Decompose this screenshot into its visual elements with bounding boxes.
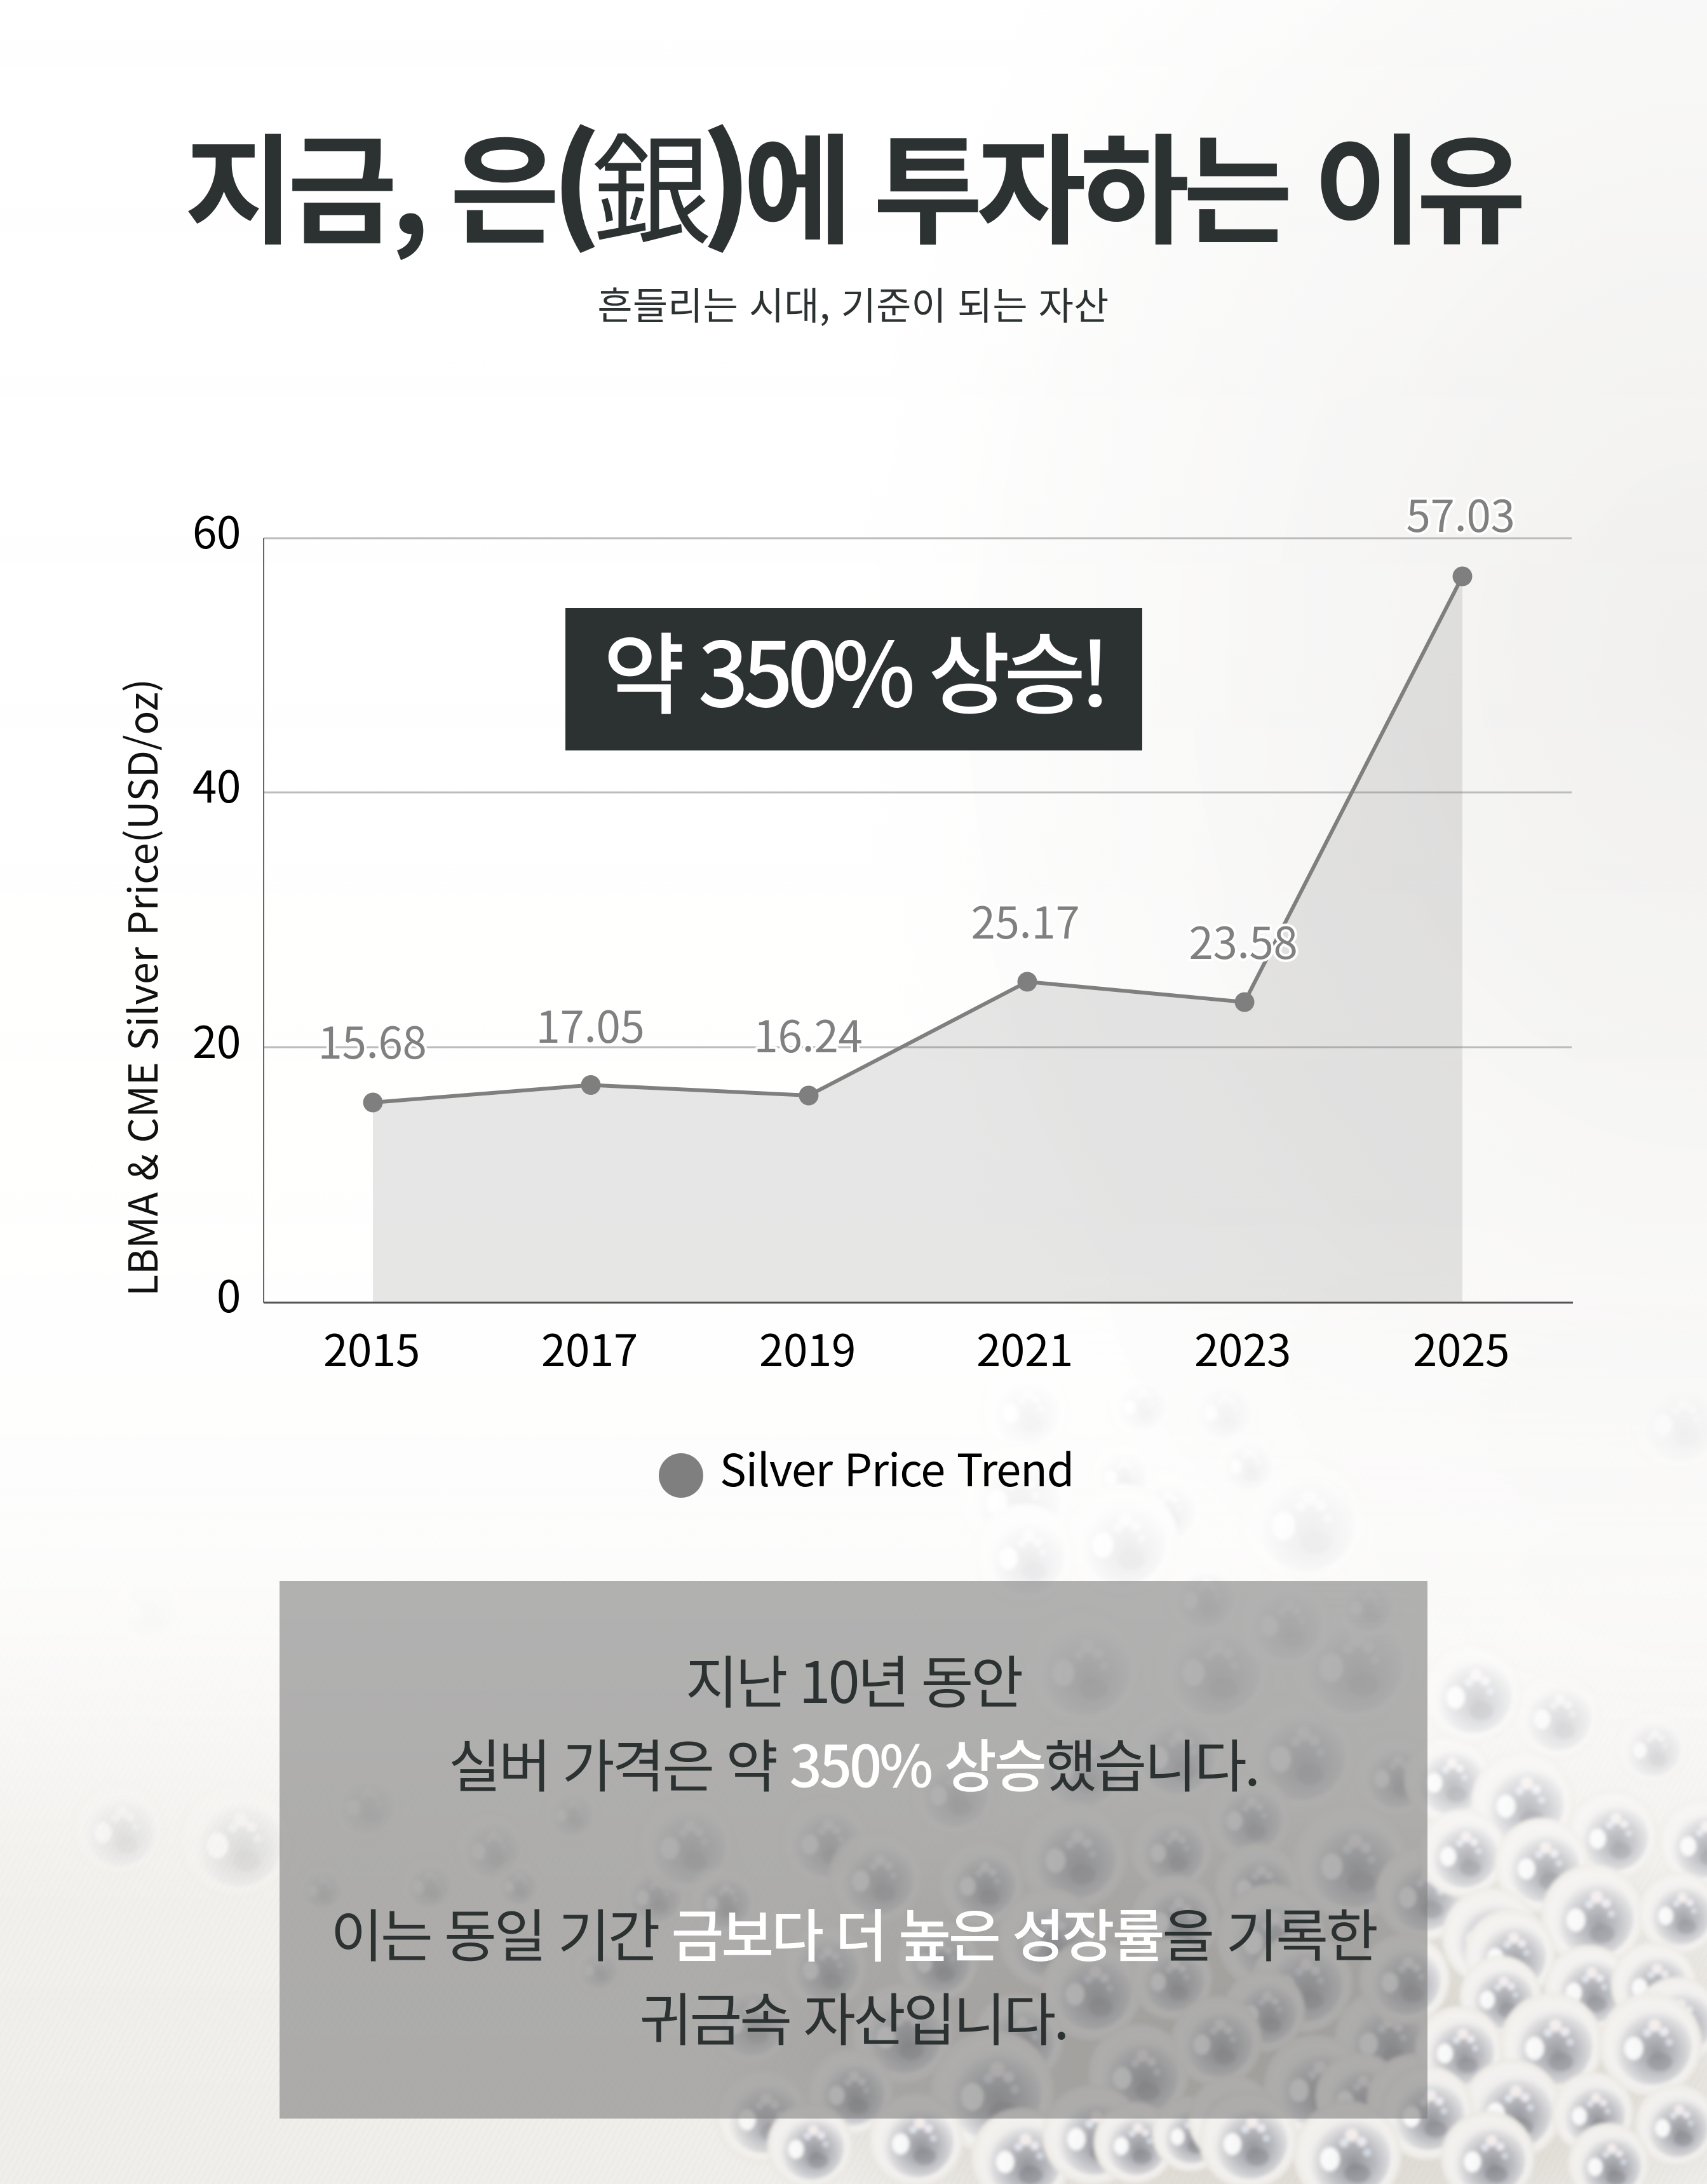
x axis tick labels: 2015 — [323, 1315, 420, 1379]
y axis title: LBMA & CME Silver Price(USD/oz) — [111, 679, 169, 1296]
callout badge: about 350% rise: 약 350% 상승! — [604, 604, 1104, 733]
x axis tick labels: 2019 — [759, 1315, 856, 1379]
y axis tick labels — [192, 498, 241, 1325]
summary text: 귀금속 자산입니다. — [640, 1974, 1067, 2057]
y axis tick labels: 20 — [192, 1007, 241, 1071]
line chart: silver price trend — [111, 481, 1573, 1500]
x axis tick labels — [323, 1315, 1509, 1379]
data points — [363, 567, 1473, 1112]
y axis tick labels: 60 — [192, 498, 241, 561]
title: 지금, 은(銀)에 투자하는 이유 — [184, 96, 1522, 269]
price line — [373, 576, 1462, 1102]
summary text: 지난 10년 동안 — [685, 1637, 1022, 1719]
data labels: 16.24 — [754, 1001, 862, 1065]
data labels: 23.58 — [1189, 908, 1297, 972]
x axis tick labels: 2025 — [1413, 1315, 1509, 1379]
y axis tick labels: 0 — [217, 1261, 241, 1325]
area fill under line — [373, 576, 1462, 1302]
legend: Silver Price Trend — [720, 1435, 1074, 1500]
data labels: 57.03 — [1407, 481, 1515, 545]
x axis tick labels: 2023 — [1194, 1315, 1291, 1379]
summary text: 이는 동일 기간 금보다 더 높은 성장률을 기록한 — [330, 1890, 1377, 1973]
data labels: 15.68 — [318, 1008, 426, 1071]
data labels — [318, 481, 1515, 1071]
summary text: 실버 가격은 약 350% 상승했습니다. — [449, 1721, 1258, 1803]
y axis tick labels: 40 — [192, 752, 241, 815]
data labels: 17.05 — [536, 992, 644, 1055]
x axis tick labels: 2021 — [976, 1315, 1073, 1379]
x axis tick labels: 2017 — [541, 1315, 638, 1379]
subtitle: 흔들리는 시대, 기준이 되는 자산 — [597, 276, 1109, 331]
summary text — [330, 1637, 1377, 2057]
data labels: 25.17 — [971, 888, 1079, 951]
summary panel — [280, 1581, 1427, 2119]
